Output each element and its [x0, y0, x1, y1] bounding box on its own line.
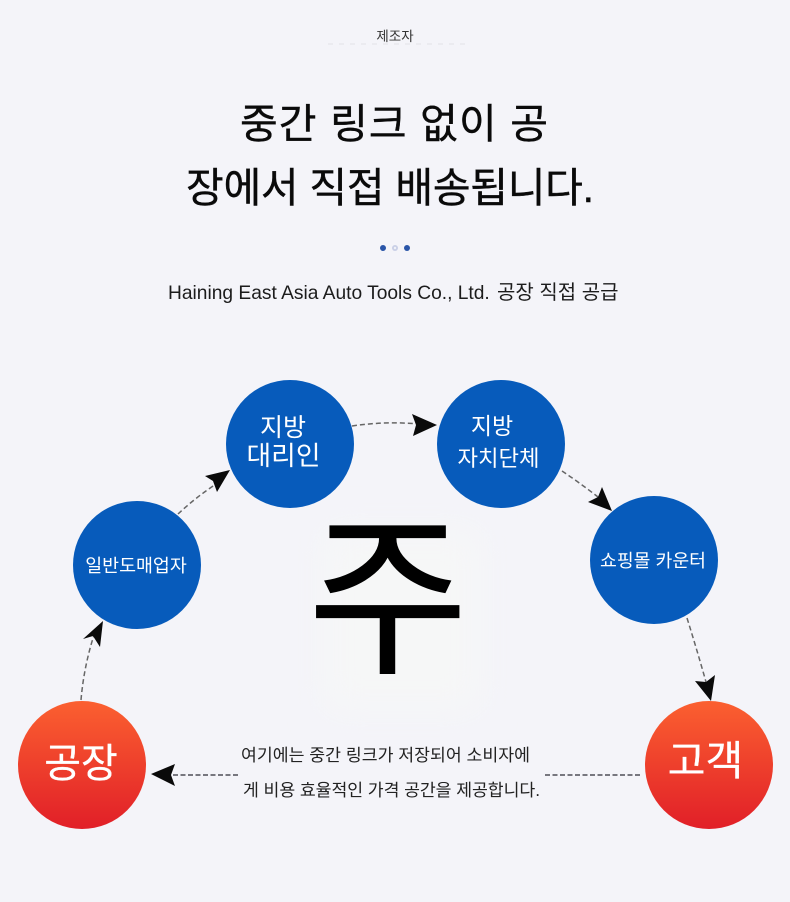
arrow: factory to wholesaler	[81, 621, 103, 700]
arrow: wholesaler to agent	[178, 470, 230, 514]
subtitle: Haining East Asia Auto Tools Co., Ltd.	[168, 283, 490, 304]
node: local agent	[226, 380, 354, 508]
node: mall counter	[590, 496, 718, 624]
arrow: customer to factory	[151, 764, 640, 786]
label: manufacturer	[328, 29, 465, 44]
arrow: agent to local government	[352, 414, 437, 436]
node: local government: 지방	[471, 413, 513, 439]
title: 중간 링크 없이 공	[240, 101, 548, 147]
caption	[241, 745, 540, 800]
dots divider	[380, 245, 410, 251]
node: factory: 공장	[44, 742, 118, 786]
node: factory	[18, 701, 146, 829]
node: local agent: 대리인	[247, 441, 320, 471]
arrow: mall to customer	[687, 618, 715, 701]
caption: 여기에는 중간 링크가 저장되어 소비자에	[241, 745, 530, 765]
node: local agent: 지방	[260, 414, 306, 442]
title: 장에서 직접 배송됩니다.	[186, 165, 594, 211]
node: local government	[437, 380, 565, 508]
caption: 게 비용 효율적인 가격 공간을 제공합니다.	[243, 780, 540, 800]
node: customer: 고객	[668, 738, 743, 784]
node: customer	[645, 701, 773, 829]
title	[186, 101, 594, 211]
node: general wholesaler: 일반도매업자	[85, 555, 187, 576]
subtitle: 공장 직접 공급	[497, 281, 619, 304]
node: local government: 자치단체	[457, 446, 540, 471]
node: general wholesaler	[73, 501, 201, 629]
node: mall counter: 쇼핑몰 카운터	[600, 550, 706, 571]
label: manufacturer: 제조자	[376, 29, 414, 44]
arrow: local government to mall	[562, 471, 612, 511]
center character: 주	[308, 502, 468, 697]
